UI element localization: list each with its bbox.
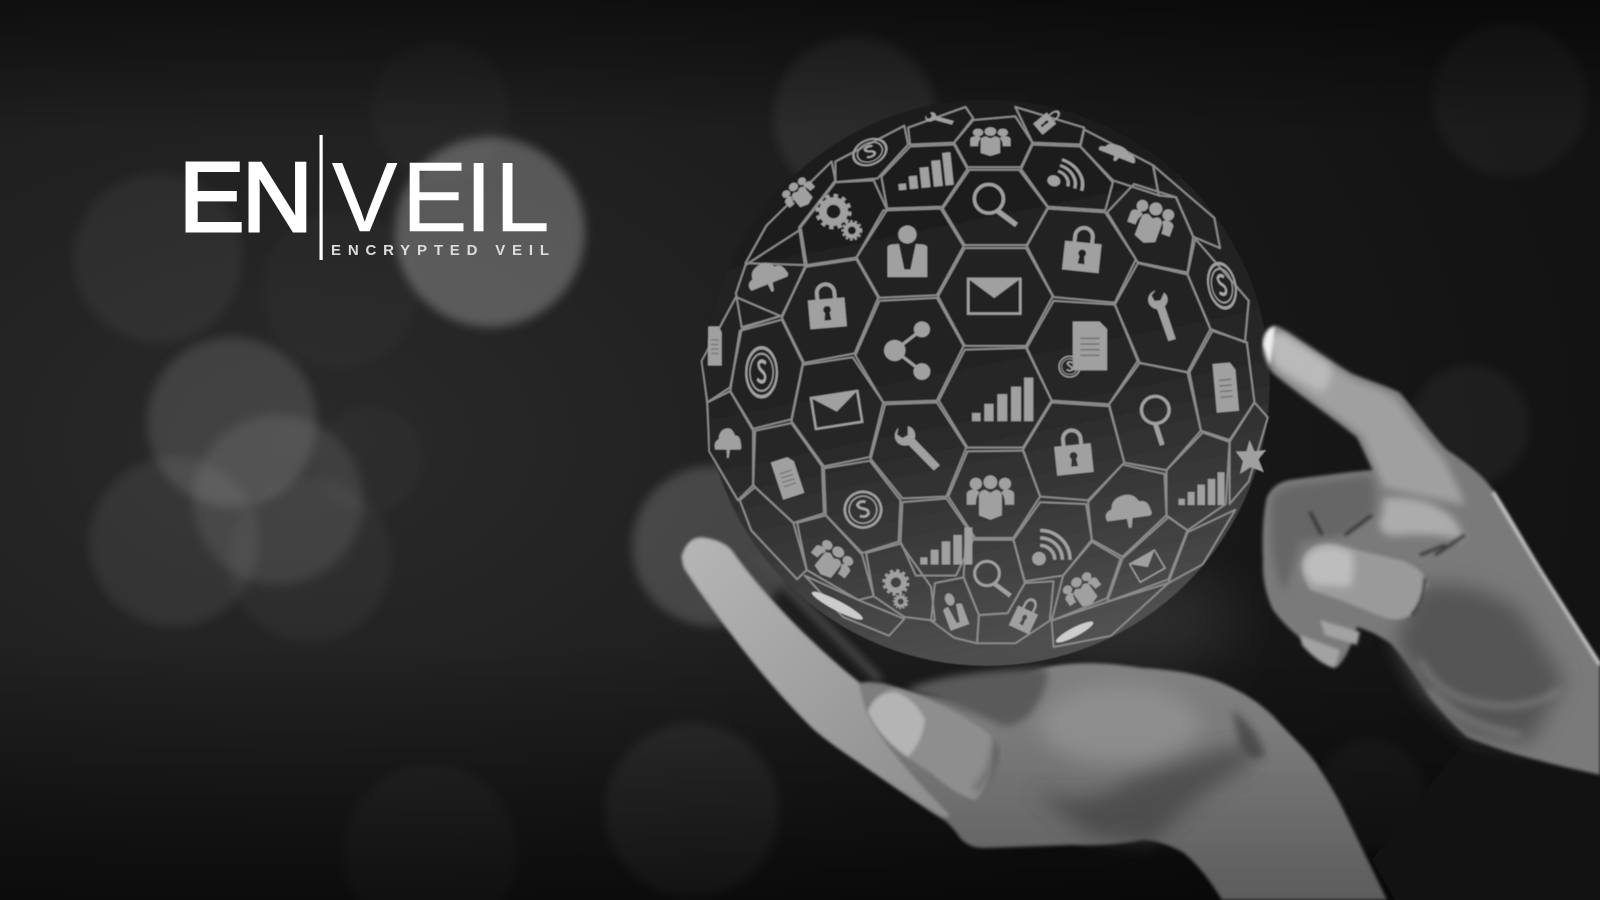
icon: bars bottom xyxy=(920,527,972,564)
logo divider bar xyxy=(320,135,323,260)
middle finger nail xyxy=(1303,546,1354,587)
icon: group top xyxy=(970,127,1011,156)
logo wordmark VEIL: VEIL xyxy=(332,142,550,252)
rim light xyxy=(1493,492,1600,665)
icon: cloud lower right xyxy=(1103,492,1153,531)
hand base xyxy=(1263,326,1600,775)
icon: wifi top xyxy=(1046,157,1089,195)
icon: star xyxy=(1236,440,1266,474)
finger creases xyxy=(1310,512,1465,615)
soft glow below globe xyxy=(1020,570,1240,670)
globe body xyxy=(704,100,1270,666)
logo tagline: ENCRYPTED VEIL xyxy=(331,242,549,259)
icon: padlock bottom xyxy=(1009,594,1043,634)
logo xyxy=(179,135,550,260)
middle finger xyxy=(1303,544,1428,619)
thumb xyxy=(868,688,993,800)
icon: person xyxy=(887,226,927,277)
right hand xyxy=(1263,326,1600,775)
icon: group bottom xyxy=(967,475,1014,520)
icon: bright pill lower right xyxy=(1054,618,1095,646)
icon: gear xyxy=(817,196,861,239)
globe xyxy=(701,100,1270,666)
icon: wrench top xyxy=(924,105,955,133)
long finger xyxy=(682,538,950,817)
palm crease highlight xyxy=(1420,660,1560,735)
icon: group lower left xyxy=(804,535,858,587)
icon: cloud far left xyxy=(715,428,741,458)
icon: wrench xyxy=(895,426,940,471)
icon: bright pill lower left xyxy=(810,588,865,623)
icon: gear bottom xyxy=(875,566,920,611)
palm and wrist xyxy=(682,538,1387,900)
index finger xyxy=(1268,331,1465,505)
icon: dollar small xyxy=(1059,356,1080,377)
icon: magnifier top xyxy=(974,184,1018,227)
icon: magnifier right xyxy=(1128,391,1186,447)
hex grid lines xyxy=(701,107,1268,647)
icon: bars lower right xyxy=(1179,472,1224,505)
thumb nail xyxy=(868,692,925,757)
lower fingertips xyxy=(1300,620,1360,668)
icon: document lower left xyxy=(771,456,804,500)
icon: dollar top xyxy=(849,134,891,170)
icon: group upper left xyxy=(778,173,821,215)
icon: share xyxy=(884,321,930,380)
icon: cloud top right xyxy=(1097,139,1139,168)
palm shadow xyxy=(1395,584,1565,745)
palm highlight xyxy=(1040,685,1200,765)
icon: dollar left xyxy=(746,348,777,397)
finger inner shadow xyxy=(755,555,880,680)
icon: magnifier bottom xyxy=(975,561,1012,597)
icon: wifi bottom xyxy=(1032,530,1070,565)
icon: person bottom xyxy=(938,590,969,631)
palm base shadow xyxy=(1030,745,1252,845)
icon: padlock upper right xyxy=(1062,224,1103,273)
icon: mail left xyxy=(810,390,863,429)
logo wordmark EN: EN xyxy=(179,142,313,252)
hollow between thumb and palm xyxy=(905,668,1047,726)
icon: document right xyxy=(1212,362,1239,413)
sleeve xyxy=(1372,745,1600,900)
icon: group lower right xyxy=(1058,568,1107,615)
icon: padlock lower xyxy=(1052,427,1094,476)
icon: bars top xyxy=(896,152,954,190)
icon: document xyxy=(1073,321,1107,370)
thumb crease xyxy=(975,745,995,790)
icon: mail lower right xyxy=(1129,550,1165,582)
icon: padlock left xyxy=(806,281,847,329)
wrist shadow xyxy=(1232,710,1265,758)
icon: padlock top xyxy=(1033,106,1064,135)
icon: dollar lower xyxy=(840,487,886,533)
icon: dollar right xyxy=(1204,261,1240,311)
icon: document far left xyxy=(708,326,722,366)
icon: mail xyxy=(967,278,1021,314)
lower hand xyxy=(682,538,1387,900)
icon: group upper right xyxy=(1122,195,1179,250)
curled finger back xyxy=(1271,476,1374,592)
icon: cloud left xyxy=(742,256,792,299)
icon: bar chart xyxy=(972,378,1033,421)
icon: wrench right xyxy=(1135,287,1192,344)
fingertip highlight xyxy=(1268,333,1331,392)
knuckle highlight xyxy=(1380,497,1465,540)
index nail xyxy=(1263,327,1275,365)
globe icons xyxy=(708,105,1266,646)
